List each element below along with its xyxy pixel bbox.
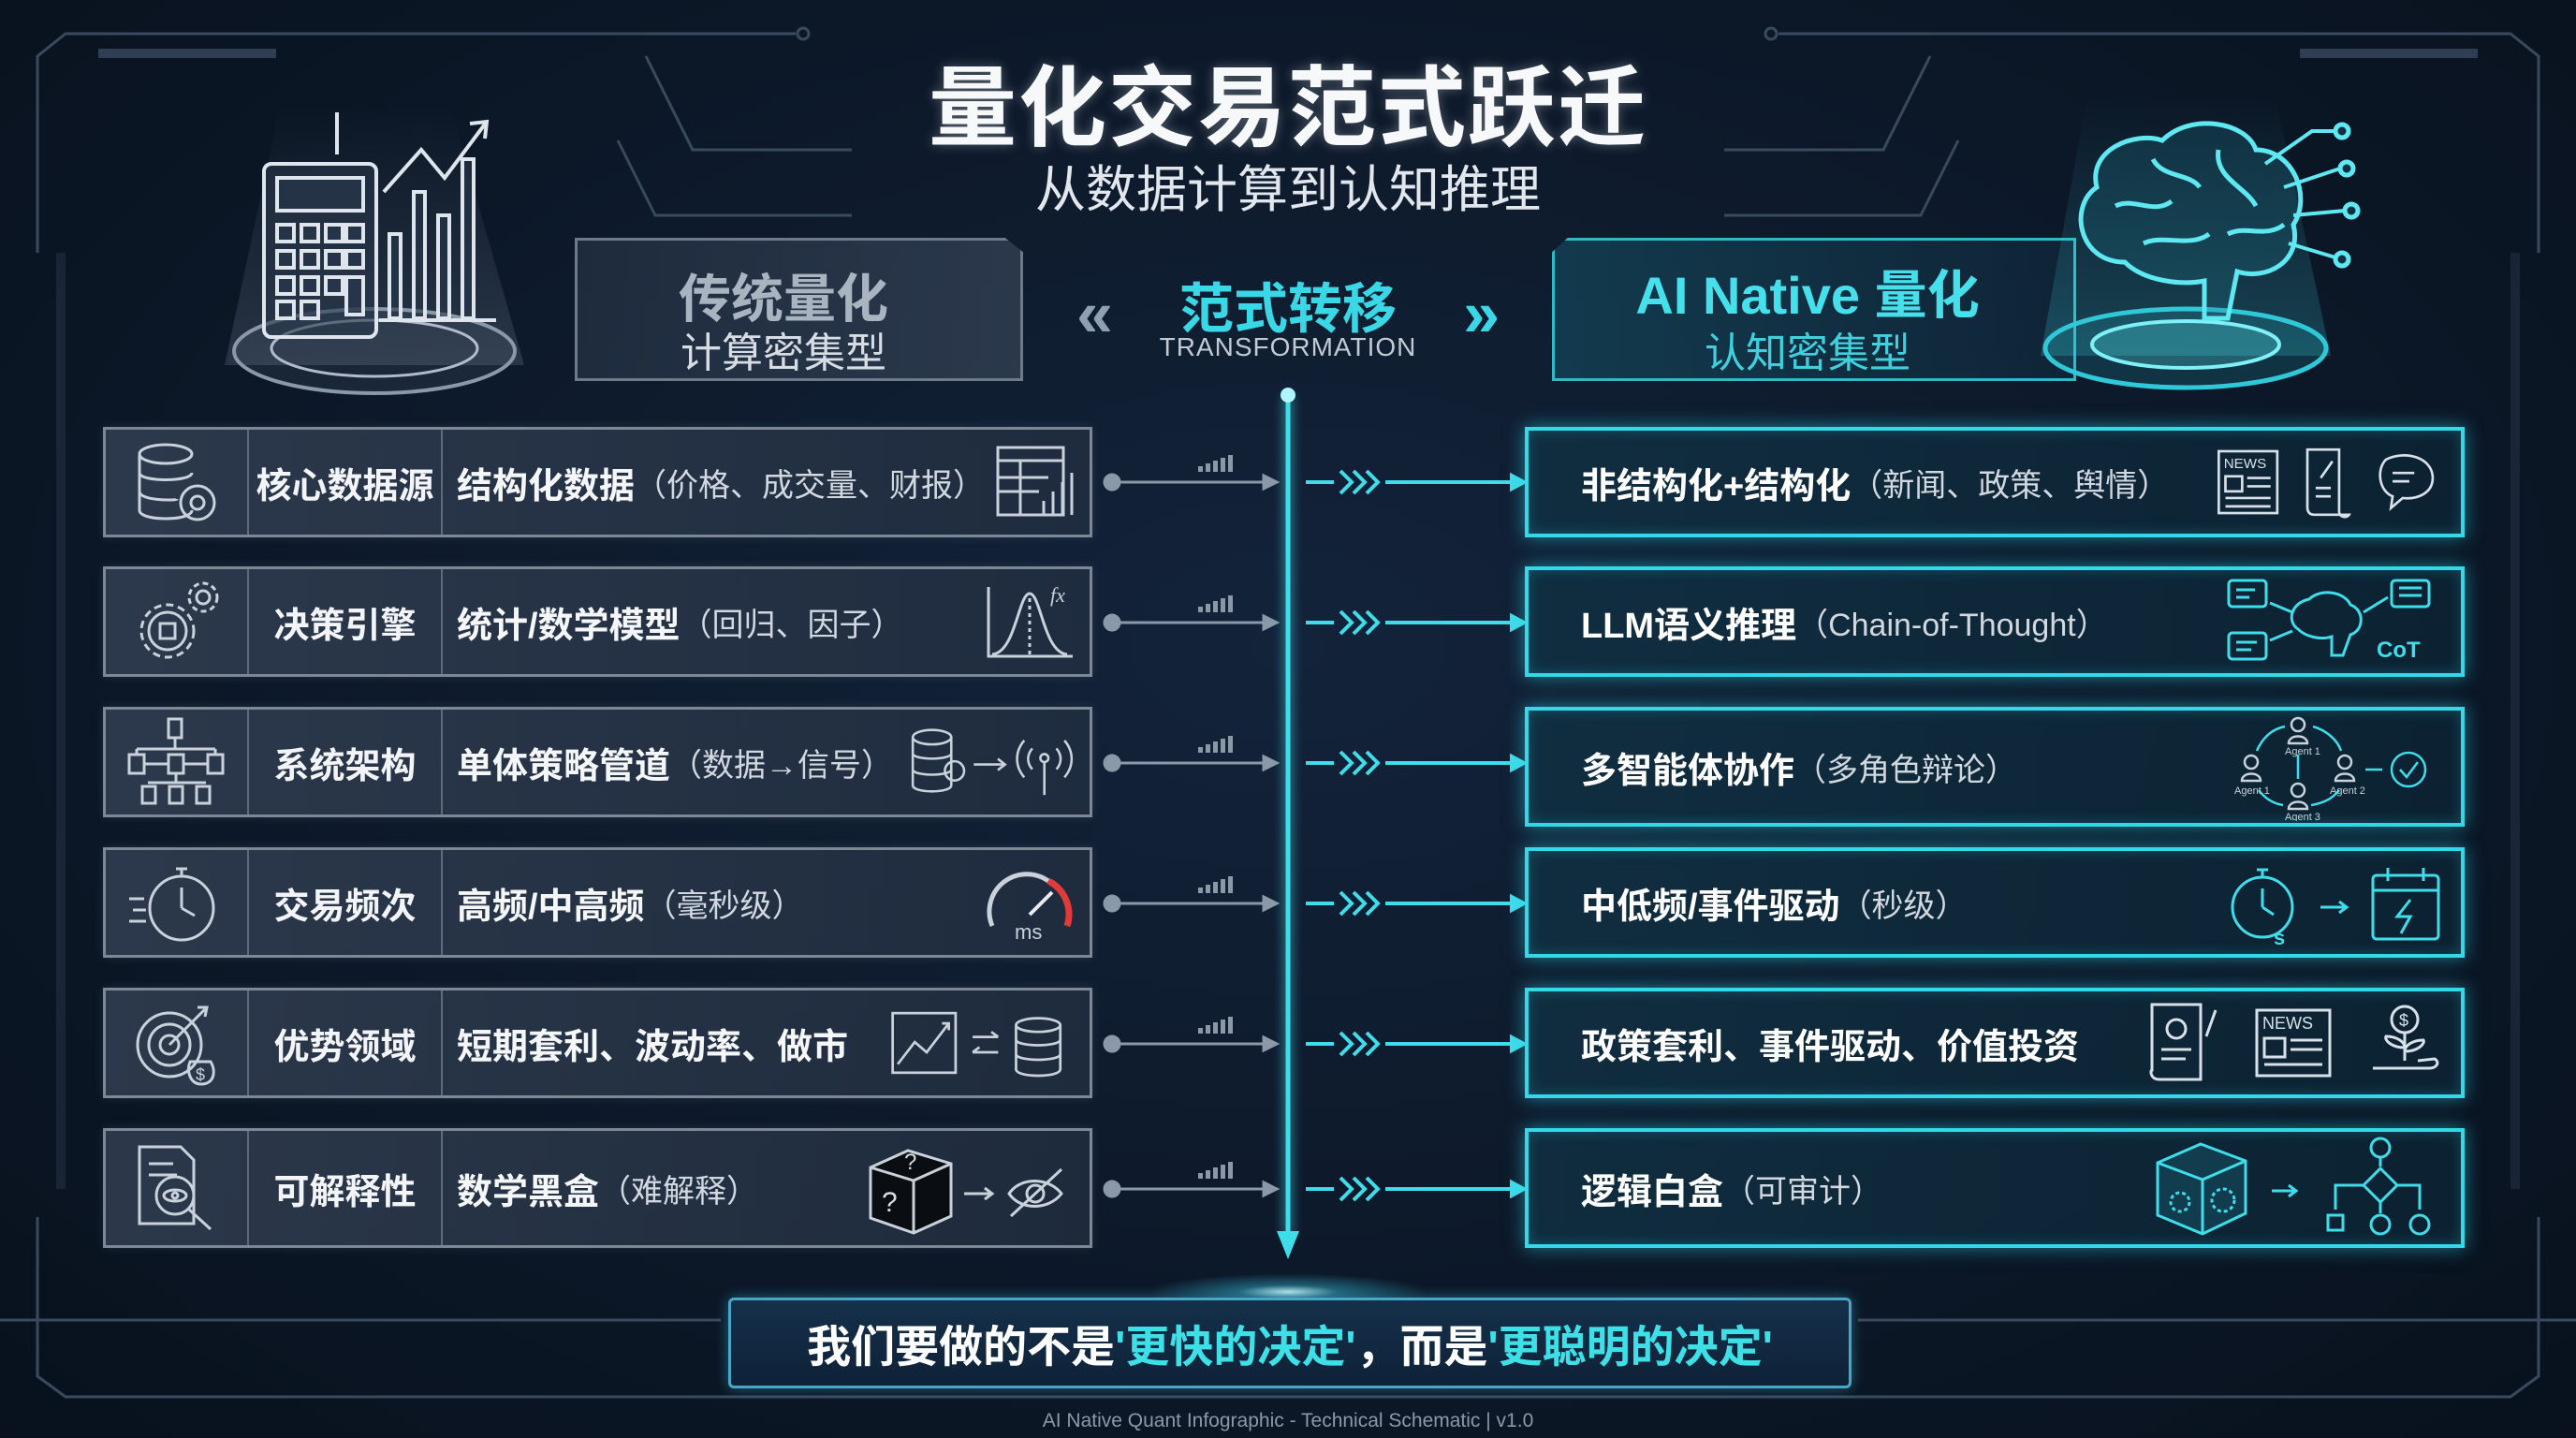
row 4 left: trading frequency: （毫秒级） <box>645 888 804 923</box>
icon: document news plant: $ <box>2399 1011 2408 1030</box>
callout: bottom banner: '更聪明的决定' <box>1488 1322 1773 1372</box>
footer text: AI Native Quant Infographic - Technical Schematic | v1.0 <box>1043 1410 1533 1431</box>
row 1 left: core data source: 核心数据源 <box>256 466 434 506</box>
row 2 left: decision engine <box>103 566 1092 677</box>
icon: brain CoT: CoT <box>2377 638 2421 663</box>
panel: traditional quant header: 传统量化 <box>679 270 888 329</box>
center: transformation label: « <box>1076 277 1113 350</box>
row 5 left: advantage domain: 短期套利、波动率、做市 <box>457 1028 848 1067</box>
row 3 right: multi-agent: （多角色辩论） <box>1794 753 2017 788</box>
row 2 right: LLM reasoning <box>1525 566 2465 677</box>
row 2 left: decision engine: （回归、因子） <box>681 607 903 642</box>
row 3 left: system architecture: 单体策略管道 <box>457 747 670 786</box>
row 4 right: medium-low frequency: （秒级） <box>1840 888 1968 923</box>
row 5 right: policy arbitrage: 政策套利、事件驱动、价值投资 <box>1581 1028 2079 1067</box>
panel: traditional quant header <box>575 238 1023 381</box>
row 6 left: interpretability <box>103 1128 1092 1248</box>
row 1 left: core data source: 结构化数据 <box>457 466 635 506</box>
row 3 right: multi-agent: 多智能体协作 <box>1581 751 1794 790</box>
icon: agents debate: Agent 1 <box>2234 785 2270 796</box>
icon: chart exchange coins <box>891 1011 1061 1077</box>
icon: brain CoT <box>2228 579 2430 663</box>
row 2 right: LLM reasoning: LLM语义推理 <box>1581 607 1796 646</box>
panel: AI native header: AI Native 量化 <box>1635 266 1980 325</box>
row 3 left: system architecture: 系统架构 <box>273 747 416 786</box>
center: transformation label: 范式转移 <box>1179 279 1397 340</box>
row 6 right: logic white box: （可审计） <box>1723 1174 1882 1210</box>
icon: bell curve fx: fx <box>1050 583 1065 607</box>
icon: black box to eye-slash <box>869 1149 1063 1235</box>
panel: AI native header: 认知密集型 <box>1705 330 1910 376</box>
row 2 right: LLM reasoning: （Chain-of-Thought） <box>1796 607 2108 642</box>
row 4 right: medium-low frequency <box>1525 847 2465 958</box>
icon: bell curve fx <box>987 583 1073 657</box>
title: 量化交易范式跃迁 <box>929 59 1647 157</box>
row 3 left: system architecture: （数据→信号） <box>670 747 893 783</box>
row 1 right: unstructured data: （新闻、政策、舆情） <box>1851 468 2169 504</box>
row 2 left: decision engine: 统计/数学模型 <box>457 607 681 646</box>
icon: document magnifier <box>106 1131 249 1245</box>
connectors between rows <box>1103 455 1525 1202</box>
icon: document news plant <box>2149 1004 2439 1080</box>
icon: cube to flowchart <box>2157 1137 2430 1236</box>
row 4 right: medium-low frequency: 中低频/事件驱动 <box>1581 888 1840 927</box>
icon: news scroll chat <box>2217 448 2434 519</box>
row 5 left: advantage domain <box>103 988 1092 1098</box>
callout: bottom banner <box>728 1298 1852 1388</box>
panel: traditional quant header: 计算密集型 <box>681 330 886 376</box>
icon: gears <box>106 569 249 674</box>
icon: agents debate: Agent 1 <box>2285 745 2320 756</box>
row 1 left: core data source <box>103 427 1092 537</box>
icon: target money: $ <box>195 1065 205 1084</box>
row 1 right: unstructured data <box>1525 427 2465 537</box>
row 2 left: decision engine: 决策引擎 <box>273 607 416 646</box>
row 6 right: logic white box: 逻辑白盒 <box>1581 1172 1723 1211</box>
row 5 left: advantage domain: 优势领域 <box>273 1028 416 1067</box>
center: transformation label: TRANSFORMATION <box>1160 332 1416 361</box>
icon: agents debate <box>2234 717 2426 821</box>
glow spark at bottom of axis <box>1148 1273 1428 1311</box>
callout: bottom banner: '更快的决定' <box>1115 1322 1355 1372</box>
icon: calculator hologram <box>225 112 524 395</box>
row 3 left: system architecture <box>103 707 1092 817</box>
icon: hierarchy <box>106 710 249 814</box>
icon: speedometer ms <box>987 872 1073 944</box>
center: transformation label <box>1076 277 1500 361</box>
row 3 right: multi-agent <box>1525 707 2465 827</box>
row 4 left: trading frequency: 高频/中高频 <box>457 888 645 927</box>
icon: database gear <box>106 430 249 535</box>
row 1 right: unstructured data: 非结构化+结构化 <box>1581 466 1851 506</box>
callout: bottom banner: 我们要做的不是 ，而是 <box>807 1322 1488 1372</box>
row 6 left: interpretability: （难解释） <box>599 1174 758 1210</box>
icon: stopwatch <box>106 850 249 955</box>
center: transformation label: » <box>1463 277 1500 350</box>
icon: document news plant: NEWS <box>2262 1013 2313 1032</box>
subtitle: 从数据计算到认知推理 <box>1035 162 1541 218</box>
icon: speedometer ms: ms <box>1015 920 1042 944</box>
icon: agents debate: Agent 2 <box>2330 785 2365 796</box>
row 4 left: trading frequency <box>103 847 1092 958</box>
arrow: central vertical axis <box>1277 388 1299 1259</box>
row 4 left: trading frequency: 交易频次 <box>273 888 416 927</box>
icon: stopwatch to calendar <box>2232 868 2439 947</box>
icon: data table chart <box>996 446 1073 517</box>
icon: db to antenna <box>912 728 1073 796</box>
row 6 right: logic white box <box>1525 1128 2465 1248</box>
row 5 right: policy arbitrage <box>1525 988 2465 1098</box>
icon: brain hologram <box>2041 121 2361 389</box>
row 6 left: interpretability: 数学黑盒 <box>457 1172 599 1211</box>
icon: target money <box>106 990 249 1095</box>
row 1 left: core data source: （价格、成交量、财报） <box>635 468 985 504</box>
row 6 left: interpretability: 可解释性 <box>273 1172 416 1211</box>
icon: black box to eye-slash: ? <box>882 1187 898 1218</box>
icon: black box to eye-slash: ? <box>904 1150 916 1175</box>
icon: news scroll chat: NEWS <box>2224 456 2266 472</box>
panel: AI native header <box>1552 238 2076 381</box>
